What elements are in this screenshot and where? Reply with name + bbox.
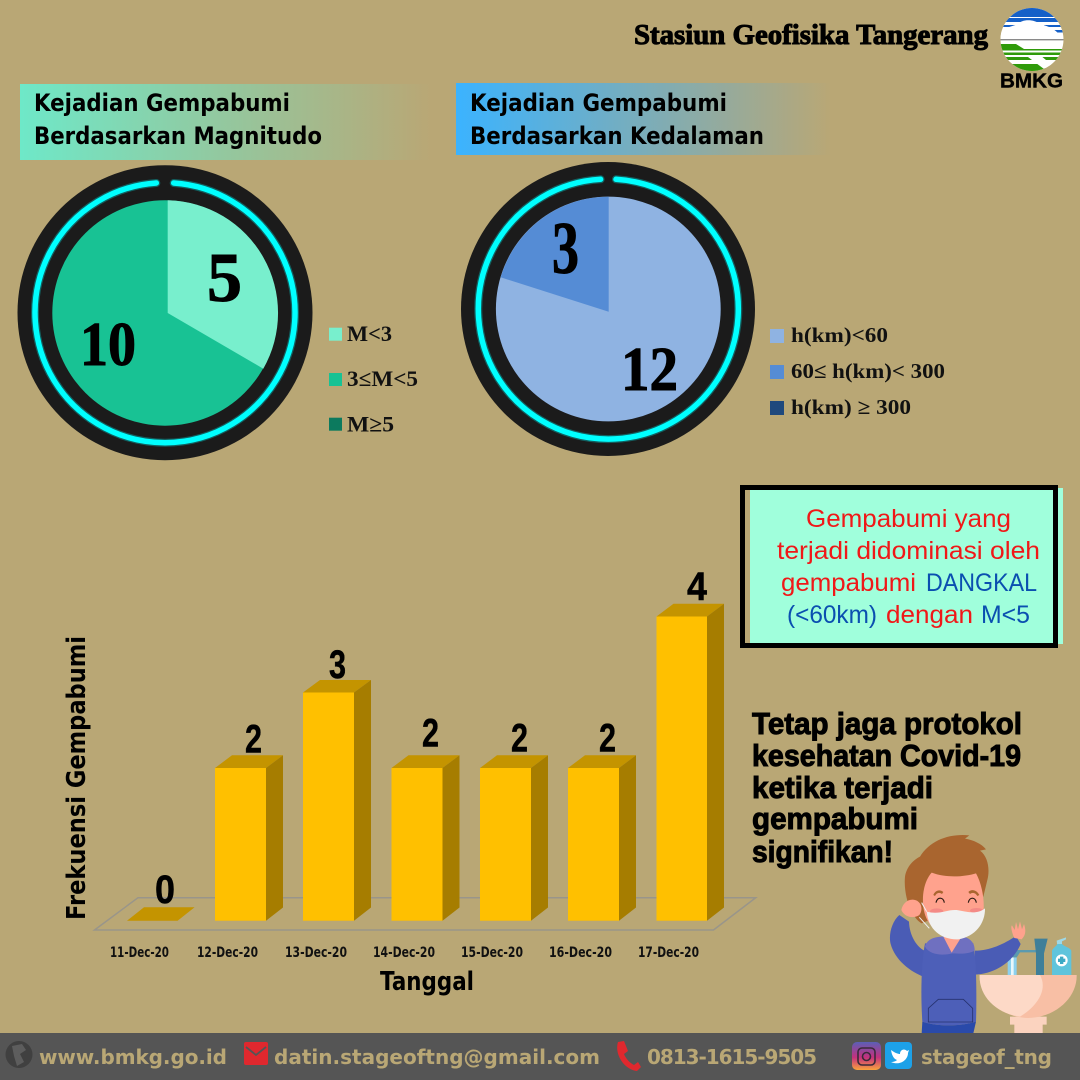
x axis date labels: 13-Dec-20 bbox=[285, 945, 347, 961]
eyebrows bbox=[933, 890, 979, 896]
legend: depth bbox=[770, 323, 945, 419]
panel: magnitude heading bbox=[20, 84, 430, 160]
bar: 16-Dec-20: 2 bbox=[599, 716, 616, 760]
panel: depth heading bbox=[456, 83, 831, 155]
callout: shallow earthquakes bbox=[742, 488, 1063, 646]
bar: 17-Dec-20: 4 bbox=[687, 565, 708, 609]
closed eyes bbox=[936, 898, 976, 903]
y axis title: Frekuensi Gempabumi bbox=[62, 636, 92, 920]
callout: shallow earthquakes: Gempabumi yang bbox=[806, 505, 1011, 533]
panel: magnitude heading: Berdasarkan Magnitudo bbox=[34, 122, 322, 150]
chart: depth pie: 3 bbox=[552, 208, 579, 290]
icon: instagram bbox=[852, 1042, 881, 1070]
sink pedestal bbox=[1010, 1017, 1047, 1033]
legend: magnitude: M≥5 bbox=[347, 412, 394, 436]
bar: 11-Dec-20: 0 bbox=[155, 868, 175, 912]
bar: 16-Dec-20 bbox=[568, 716, 636, 921]
head hair back bbox=[905, 835, 989, 923]
bar: 15-Dec-20 bbox=[480, 716, 548, 921]
callout: shallow earthquakes: terjadi didominasi oleh bbox=[777, 537, 1040, 565]
legend: depth: 60≤ h(km)< 300 bbox=[791, 359, 945, 383]
panel: depth heading: Kejadian Gempabumi bbox=[470, 89, 727, 117]
left arm bbox=[890, 915, 927, 977]
chart: depth pie bbox=[461, 162, 755, 456]
panel: depth heading: Berdasarkan Kedalaman bbox=[470, 122, 764, 150]
face bbox=[923, 873, 984, 937]
callout: shallow earthquakes: gempabumi bbox=[781, 569, 916, 597]
text block: health protocol message bbox=[752, 706, 1022, 869]
icon: BMKG logo: BMKG bbox=[1000, 70, 1063, 92]
email: datin.stageoftng@gmail.com bbox=[274, 1045, 600, 1069]
bar: 12-Dec-20 bbox=[215, 718, 283, 921]
callout: shallow earthquakes: (<60km) bbox=[787, 601, 877, 629]
x axis date labels: 16-Dec-20 bbox=[549, 945, 612, 961]
callout: shallow earthquakes: DANGKAL bbox=[926, 569, 1037, 597]
icon: BMKG logo bbox=[1000, 8, 1064, 92]
x axis date labels: 14-Dec-20 bbox=[373, 945, 435, 961]
bar: 14-Dec-20: 2 bbox=[422, 712, 439, 756]
right hand and arm bbox=[975, 936, 1021, 975]
social handle: stageof_tng bbox=[921, 1045, 1052, 1069]
bar: 12-Dec-20: 2 bbox=[245, 718, 262, 762]
legend: magnitude: 3≤M<5 bbox=[347, 366, 418, 391]
bar: 17-Dec-20 bbox=[656, 565, 724, 921]
mask bbox=[927, 908, 985, 939]
icon: globe bbox=[6, 1041, 32, 1068]
icon: phone bbox=[617, 1041, 641, 1071]
footer bar bbox=[0, 1033, 1080, 1080]
text block: health protocol message: ketika terjadi bbox=[752, 770, 933, 805]
icon: mail bbox=[244, 1042, 268, 1065]
sink basin bbox=[980, 975, 1077, 1018]
bar: 14-Dec-20 bbox=[392, 712, 460, 921]
x axis date labels: 15-Dec-20 bbox=[461, 945, 523, 961]
legend: depth: h(km) ≥ 300 bbox=[791, 395, 911, 419]
callout: shallow earthquakes: dengan bbox=[886, 601, 973, 629]
chart: magnitude pie: 10 bbox=[80, 311, 136, 379]
website: www.bmkg.go.id bbox=[39, 1045, 227, 1069]
bar: 11-Dec-20 bbox=[127, 868, 195, 921]
x axis title: Tanggal bbox=[380, 967, 474, 997]
callout: shallow earthquakes: M<5 bbox=[981, 601, 1030, 629]
hoodie body bbox=[921, 943, 976, 1025]
ear and raised hand bbox=[901, 900, 921, 917]
text block: health protocol message: gempabumi bbox=[752, 801, 918, 836]
hood bbox=[925, 937, 975, 955]
cheeks bbox=[930, 908, 943, 914]
chart floor bbox=[94, 898, 756, 930]
faucet bbox=[1006, 939, 1048, 975]
hoodie pocket bbox=[928, 999, 973, 1022]
icon: twitter bbox=[885, 1042, 912, 1069]
bar: 13-Dec-20: 3 bbox=[329, 643, 346, 687]
header: station name: Stasiun Geofisika Tangerang bbox=[634, 20, 988, 51]
text block: health protocol message: Tetap jaga protokol bbox=[752, 706, 1022, 741]
legend: depth: h(km)<60 bbox=[791, 323, 888, 347]
chart: magnitude pie: 5 bbox=[207, 240, 242, 317]
text block: health protocol message: signifikan! bbox=[752, 834, 893, 869]
illustration: masked boy washing hands bbox=[890, 835, 1077, 1033]
panel: magnitude heading: Kejadian Gempabumi bbox=[34, 89, 290, 117]
x axis date labels: 11-Dec-20 bbox=[110, 945, 169, 961]
chart: daily frequency 3D bars bbox=[62, 565, 756, 997]
sanitizer bottle bbox=[1052, 937, 1071, 975]
legend: magnitude: M<3 bbox=[347, 321, 392, 346]
x axis date labels: 12-Dec-20 bbox=[197, 945, 258, 961]
x axis date labels bbox=[110, 945, 699, 961]
bar: 13-Dec-20 bbox=[303, 643, 371, 921]
text block: health protocol message: kesehatan Covid-19 bbox=[752, 738, 1021, 773]
legend: magnitude bbox=[329, 321, 418, 436]
bar: 15-Dec-20: 2 bbox=[511, 716, 528, 760]
chart: depth pie: 12 bbox=[621, 336, 678, 404]
chart: magnitude pie bbox=[18, 165, 312, 460]
x axis date labels: 17-Dec-20 bbox=[638, 945, 699, 961]
phone number: 0813-1615-9505 bbox=[647, 1045, 817, 1069]
